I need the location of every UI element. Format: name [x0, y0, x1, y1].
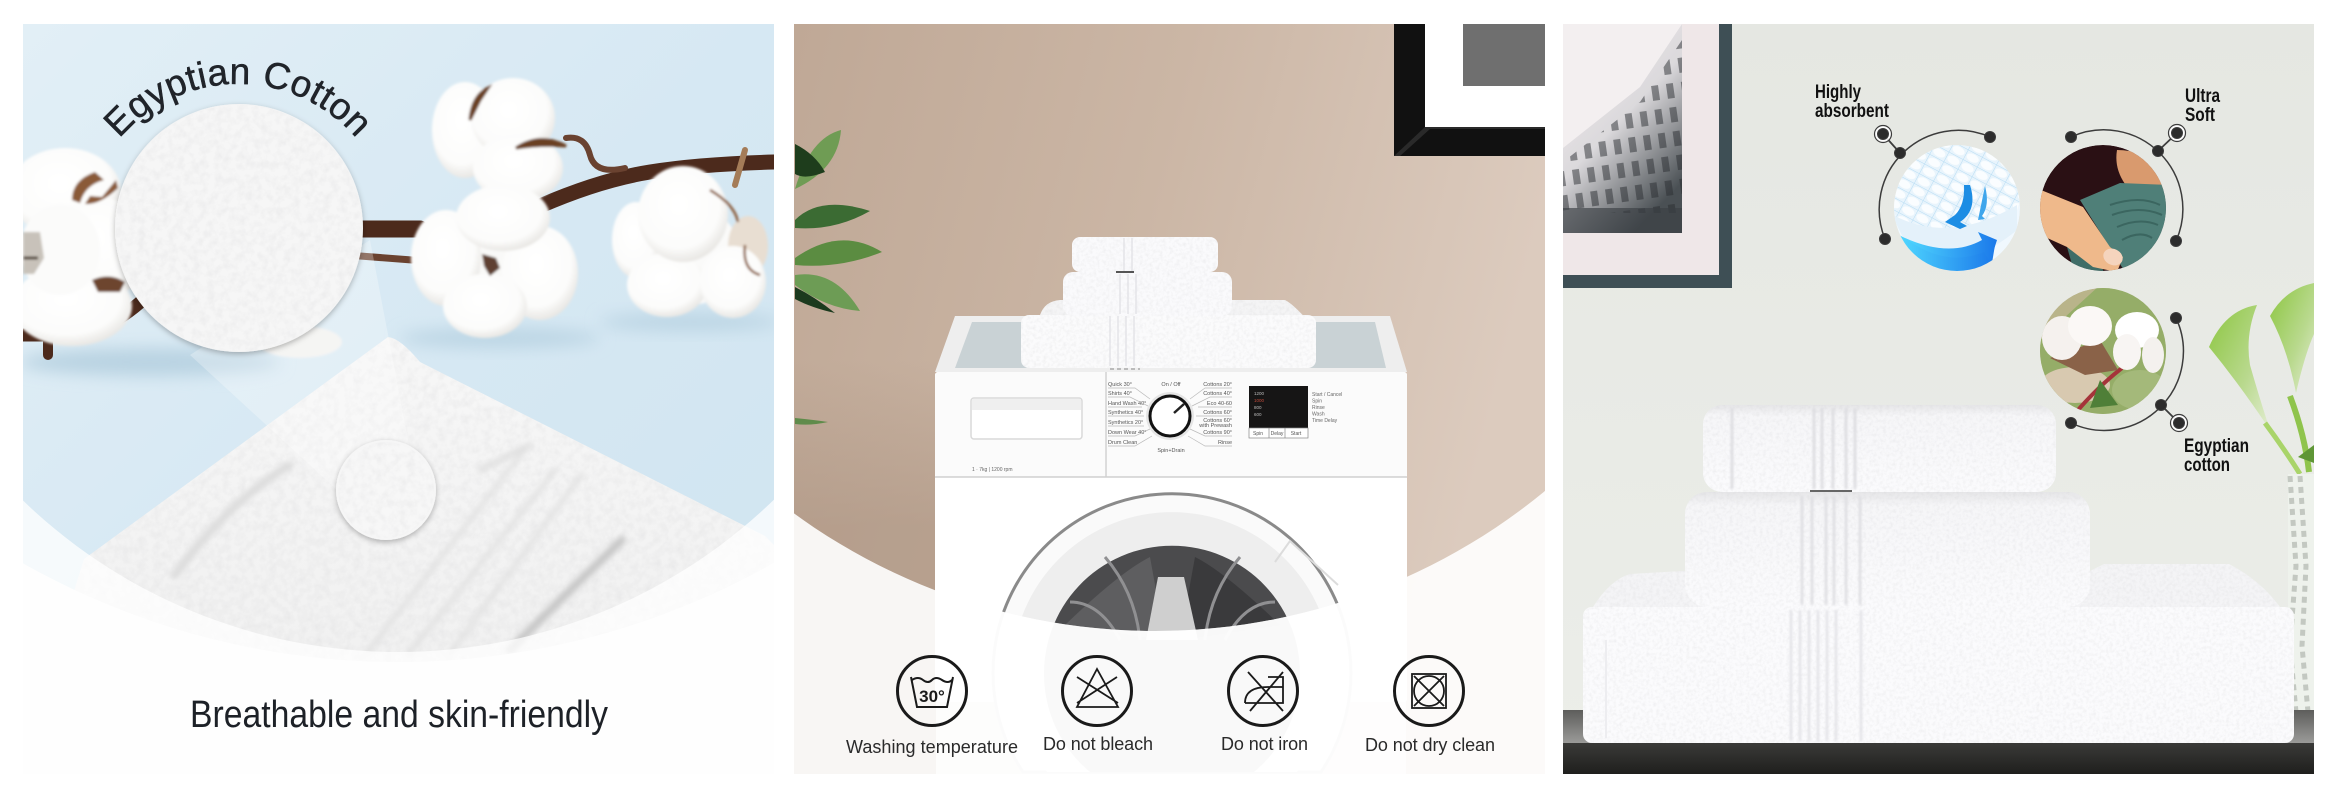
control display: Start / Cancel [1312, 392, 1342, 398]
arc connector [1874, 126, 1996, 244]
plant leaves [795, 130, 882, 425]
care labels: Washing temperature [846, 737, 1018, 757]
panel: washing care instructions [794, 24, 1545, 774]
calla plant [2209, 283, 2314, 474]
towel stack on washer [1021, 237, 1316, 369]
program dial with labels: Hand Wash 40° [1108, 401, 1146, 407]
program dial with labels: Eco 40-60 [1207, 401, 1232, 407]
feature: highly absorbent [1815, 82, 2020, 275]
program dial with labels: Cottons 40° [1203, 391, 1232, 397]
control display: Spin [1312, 398, 1322, 404]
icon: do not dry clean [1394, 656, 1464, 726]
small magnifier circle [336, 440, 436, 540]
control display: Start [1291, 431, 1302, 437]
control display: Spin [1253, 431, 1263, 437]
control display: 800 [1254, 405, 1262, 410]
program dial with labels: Rinse [1218, 440, 1232, 446]
feature: egyptian cotton [2040, 285, 2249, 457]
panel: towel set features [1563, 24, 2314, 774]
detergent drawer [971, 398, 1082, 439]
label: Egyptian [2184, 436, 2249, 457]
program dial with labels: Quick 30° [1108, 382, 1132, 388]
washing machine [935, 316, 1407, 691]
framed picture [1394, 24, 1545, 156]
framed photo [1563, 24, 1732, 288]
control display: Delay [1271, 431, 1284, 437]
machine door [1002, 492, 1338, 631]
care icons [898, 656, 1464, 726]
control display: 1200 [1254, 391, 1265, 396]
bottom white arc overlay [23, 500, 774, 774]
middle towel [1685, 492, 2090, 607]
program dial with labels: Cottons 60° [1203, 418, 1232, 424]
cotton branch [23, 138, 774, 355]
program dial with labels: Synthetics 20° [1108, 420, 1143, 426]
program dial with labels: Spin+Drain [1157, 448, 1185, 454]
control display: Time Delay [1312, 418, 1338, 424]
program dial with labels: On / Off [1161, 382, 1181, 388]
label: cotton: cotton [2184, 455, 2230, 476]
program dial with labels: Cottons 20° [1203, 382, 1232, 388]
care labels: Do not bleach [1043, 734, 1153, 754]
shelf [1563, 710, 2314, 774]
panel: Egyptian cotton close-up [23, 24, 774, 735]
control display: Rinse [1312, 405, 1325, 411]
cotton bolls [9, 78, 768, 358]
shadow on wall [794, 418, 935, 590]
control display: 1000 [1254, 398, 1265, 403]
program dial with labels: Drum Clean [1108, 440, 1137, 446]
label: Highly [1815, 82, 1861, 103]
large magnifier circle: towel texture [115, 104, 363, 352]
care labels: Do not iron [1221, 734, 1308, 754]
program dial with labels: Synthetics 40° [1108, 410, 1143, 416]
magnifier beam [190, 240, 388, 426]
arc connector [2066, 124, 2186, 246]
icon: do not iron [1228, 656, 1298, 726]
label: Ultra [2185, 86, 2220, 107]
program dial with labels [1108, 382, 1232, 454]
control display: Wash [1312, 412, 1325, 418]
washing machine: 1 · 7kg | 1200 rpm [972, 467, 1012, 473]
label: absorbent: absorbent [1815, 101, 1890, 122]
glass vase [2288, 474, 2310, 710]
care labels: Do not dry clean [1365, 735, 1495, 755]
towel corner [90, 337, 745, 652]
care labels [846, 736, 1494, 757]
program dial with labels: Cottons 60° [1203, 410, 1232, 416]
label: soft: Soft [2185, 105, 2216, 126]
control display: 600 [1254, 412, 1262, 417]
program dial with labels: with Prewash [1198, 423, 1232, 429]
program dial with labels: Shirts 40° [1108, 391, 1132, 397]
program dial with labels: Cottons 90° [1203, 430, 1232, 436]
arc connector [2066, 312, 2188, 432]
icon: washing temperature 30 [898, 656, 966, 726]
control display [1249, 386, 1342, 438]
icon: washing temperature 30: 30° [919, 687, 945, 706]
curved title: Egyptian Cotton: Egyptian Cotton [102, 60, 368, 137]
icon: do not bleach [1062, 656, 1132, 726]
feature: ultra soft [2036, 86, 2220, 275]
lower white arc overlay [794, 491, 1545, 774]
big towel [1583, 564, 2294, 743]
top towel [1703, 405, 2056, 492]
caption: Breathable and skin-friendly: Breathable and skin-friendly [190, 694, 608, 736]
program dial with labels: Down Wear 40° [1108, 430, 1146, 436]
